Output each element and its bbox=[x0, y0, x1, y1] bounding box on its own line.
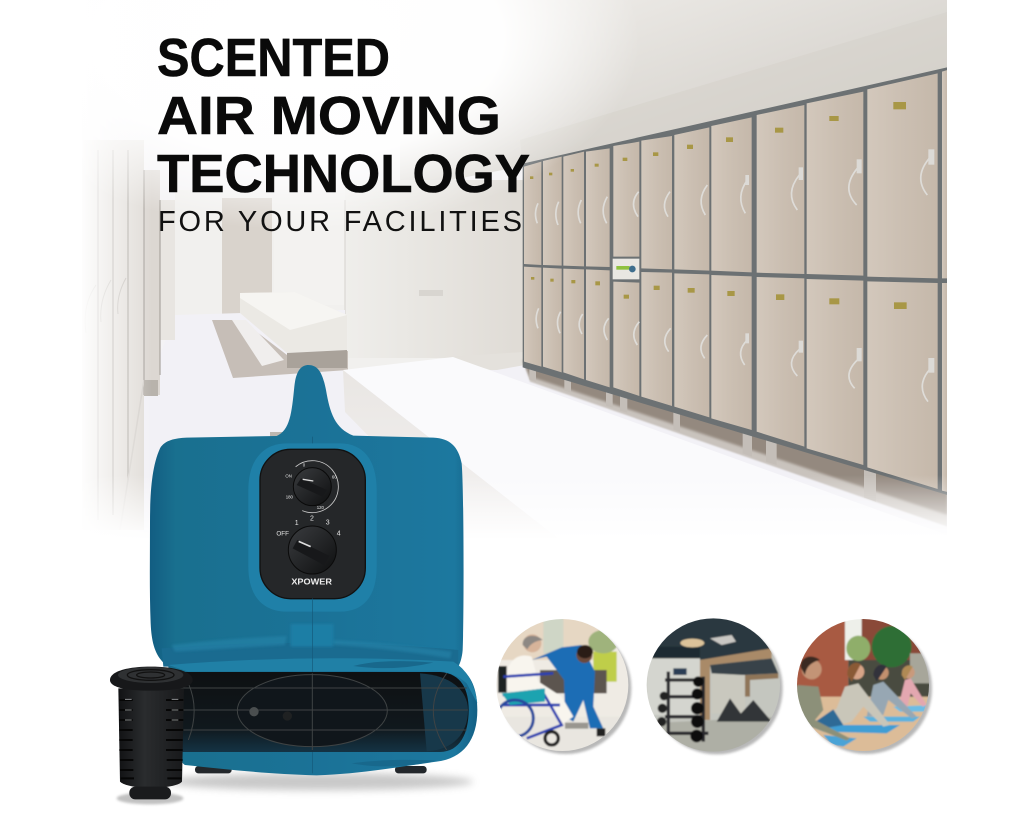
feet bbox=[195, 766, 427, 773]
potted plant bbox=[593, 652, 617, 682]
dial labels: 2 bbox=[310, 516, 314, 523]
speed knob bbox=[288, 526, 336, 574]
plants bbox=[872, 626, 912, 667]
wheelchair bbox=[498, 666, 507, 693]
locker handles bbox=[535, 157, 931, 402]
left lockers bbox=[82, 140, 175, 530]
floor shadow bbox=[167, 773, 473, 790]
scent filter cartridge bbox=[110, 667, 193, 804]
body highlights bbox=[172, 636, 452, 658]
locker frame bbox=[523, 67, 947, 495]
lower lip highlight bbox=[168, 658, 477, 703]
title line 3: TECHNOLOGY bbox=[157, 144, 530, 204]
locker legs bbox=[529, 362, 876, 502]
person 2 bbox=[834, 682, 890, 728]
back corridor walls bbox=[222, 180, 523, 370]
dial labels: ON bbox=[285, 473, 292, 478]
ceiling and wall bbox=[400, 0, 947, 190]
lock brackets bbox=[745, 149, 934, 373]
dial labels: 120 bbox=[317, 505, 325, 510]
control panel bbox=[260, 449, 365, 599]
title bbox=[157, 28, 530, 238]
floor bbox=[797, 697, 933, 757]
weight rack bbox=[657, 668, 708, 742]
photo: gym bbox=[643, 610, 783, 757]
dial labels: 4 bbox=[337, 530, 341, 537]
body shadow band bbox=[162, 643, 458, 667]
background photo: locker room bbox=[82, 0, 947, 540]
facility photos bbox=[490, 610, 937, 757]
center bump bbox=[291, 624, 333, 647]
control panel ridge bbox=[248, 443, 377, 612]
title line 2: AIR MOVING bbox=[157, 86, 501, 146]
fade overlays bbox=[82, 0, 947, 540]
body grooves bbox=[352, 661, 437, 766]
filter cap bbox=[110, 667, 193, 691]
caregiver bbox=[532, 645, 603, 728]
shadow beneath lockers bbox=[523, 360, 947, 527]
timer dial ring bbox=[276, 450, 349, 523]
photo: patient care bbox=[496, 619, 633, 756]
air outlet bbox=[180, 672, 469, 752]
person 3 bbox=[867, 682, 917, 718]
ceiling lights bbox=[680, 639, 704, 647]
dial labels: 1 bbox=[295, 520, 299, 527]
dial labels: 3 bbox=[326, 519, 330, 526]
photo: yoga class bbox=[797, 619, 934, 756]
locker doors bbox=[524, 70, 947, 492]
right lockers bbox=[523, 67, 947, 527]
dial labels: 60 bbox=[332, 474, 337, 479]
brand logo: XPOWER bbox=[291, 577, 332, 587]
floor bbox=[222, 310, 523, 372]
timer knob bbox=[293, 468, 331, 506]
subtitle: FOR YOUR FACILITIES bbox=[158, 206, 522, 238]
dial labels: OFF bbox=[276, 530, 289, 537]
filter slots bbox=[119, 700, 183, 778]
locker number plaques bbox=[530, 102, 907, 309]
wood beams bbox=[700, 648, 772, 720]
large bench bbox=[270, 357, 798, 482]
dark floor strips bbox=[212, 320, 348, 378]
keypad panel bbox=[613, 259, 639, 279]
floor bbox=[660, 717, 772, 752]
air mover product bbox=[110, 365, 477, 804]
brick wall bbox=[797, 622, 850, 698]
seam bbox=[312, 437, 314, 773]
person 4 bbox=[900, 678, 926, 708]
far bench bbox=[240, 292, 347, 368]
dial labels: 0 bbox=[303, 463, 306, 468]
patient bbox=[507, 656, 573, 723]
dial labels bbox=[276, 463, 341, 537]
gym equipment bbox=[717, 698, 772, 722]
person 1 bbox=[797, 685, 850, 741]
blower body bbox=[150, 365, 477, 775]
dial labels: 180 bbox=[286, 494, 294, 499]
yoga mats bbox=[807, 725, 900, 733]
title line 1: SCENTED bbox=[157, 28, 390, 88]
